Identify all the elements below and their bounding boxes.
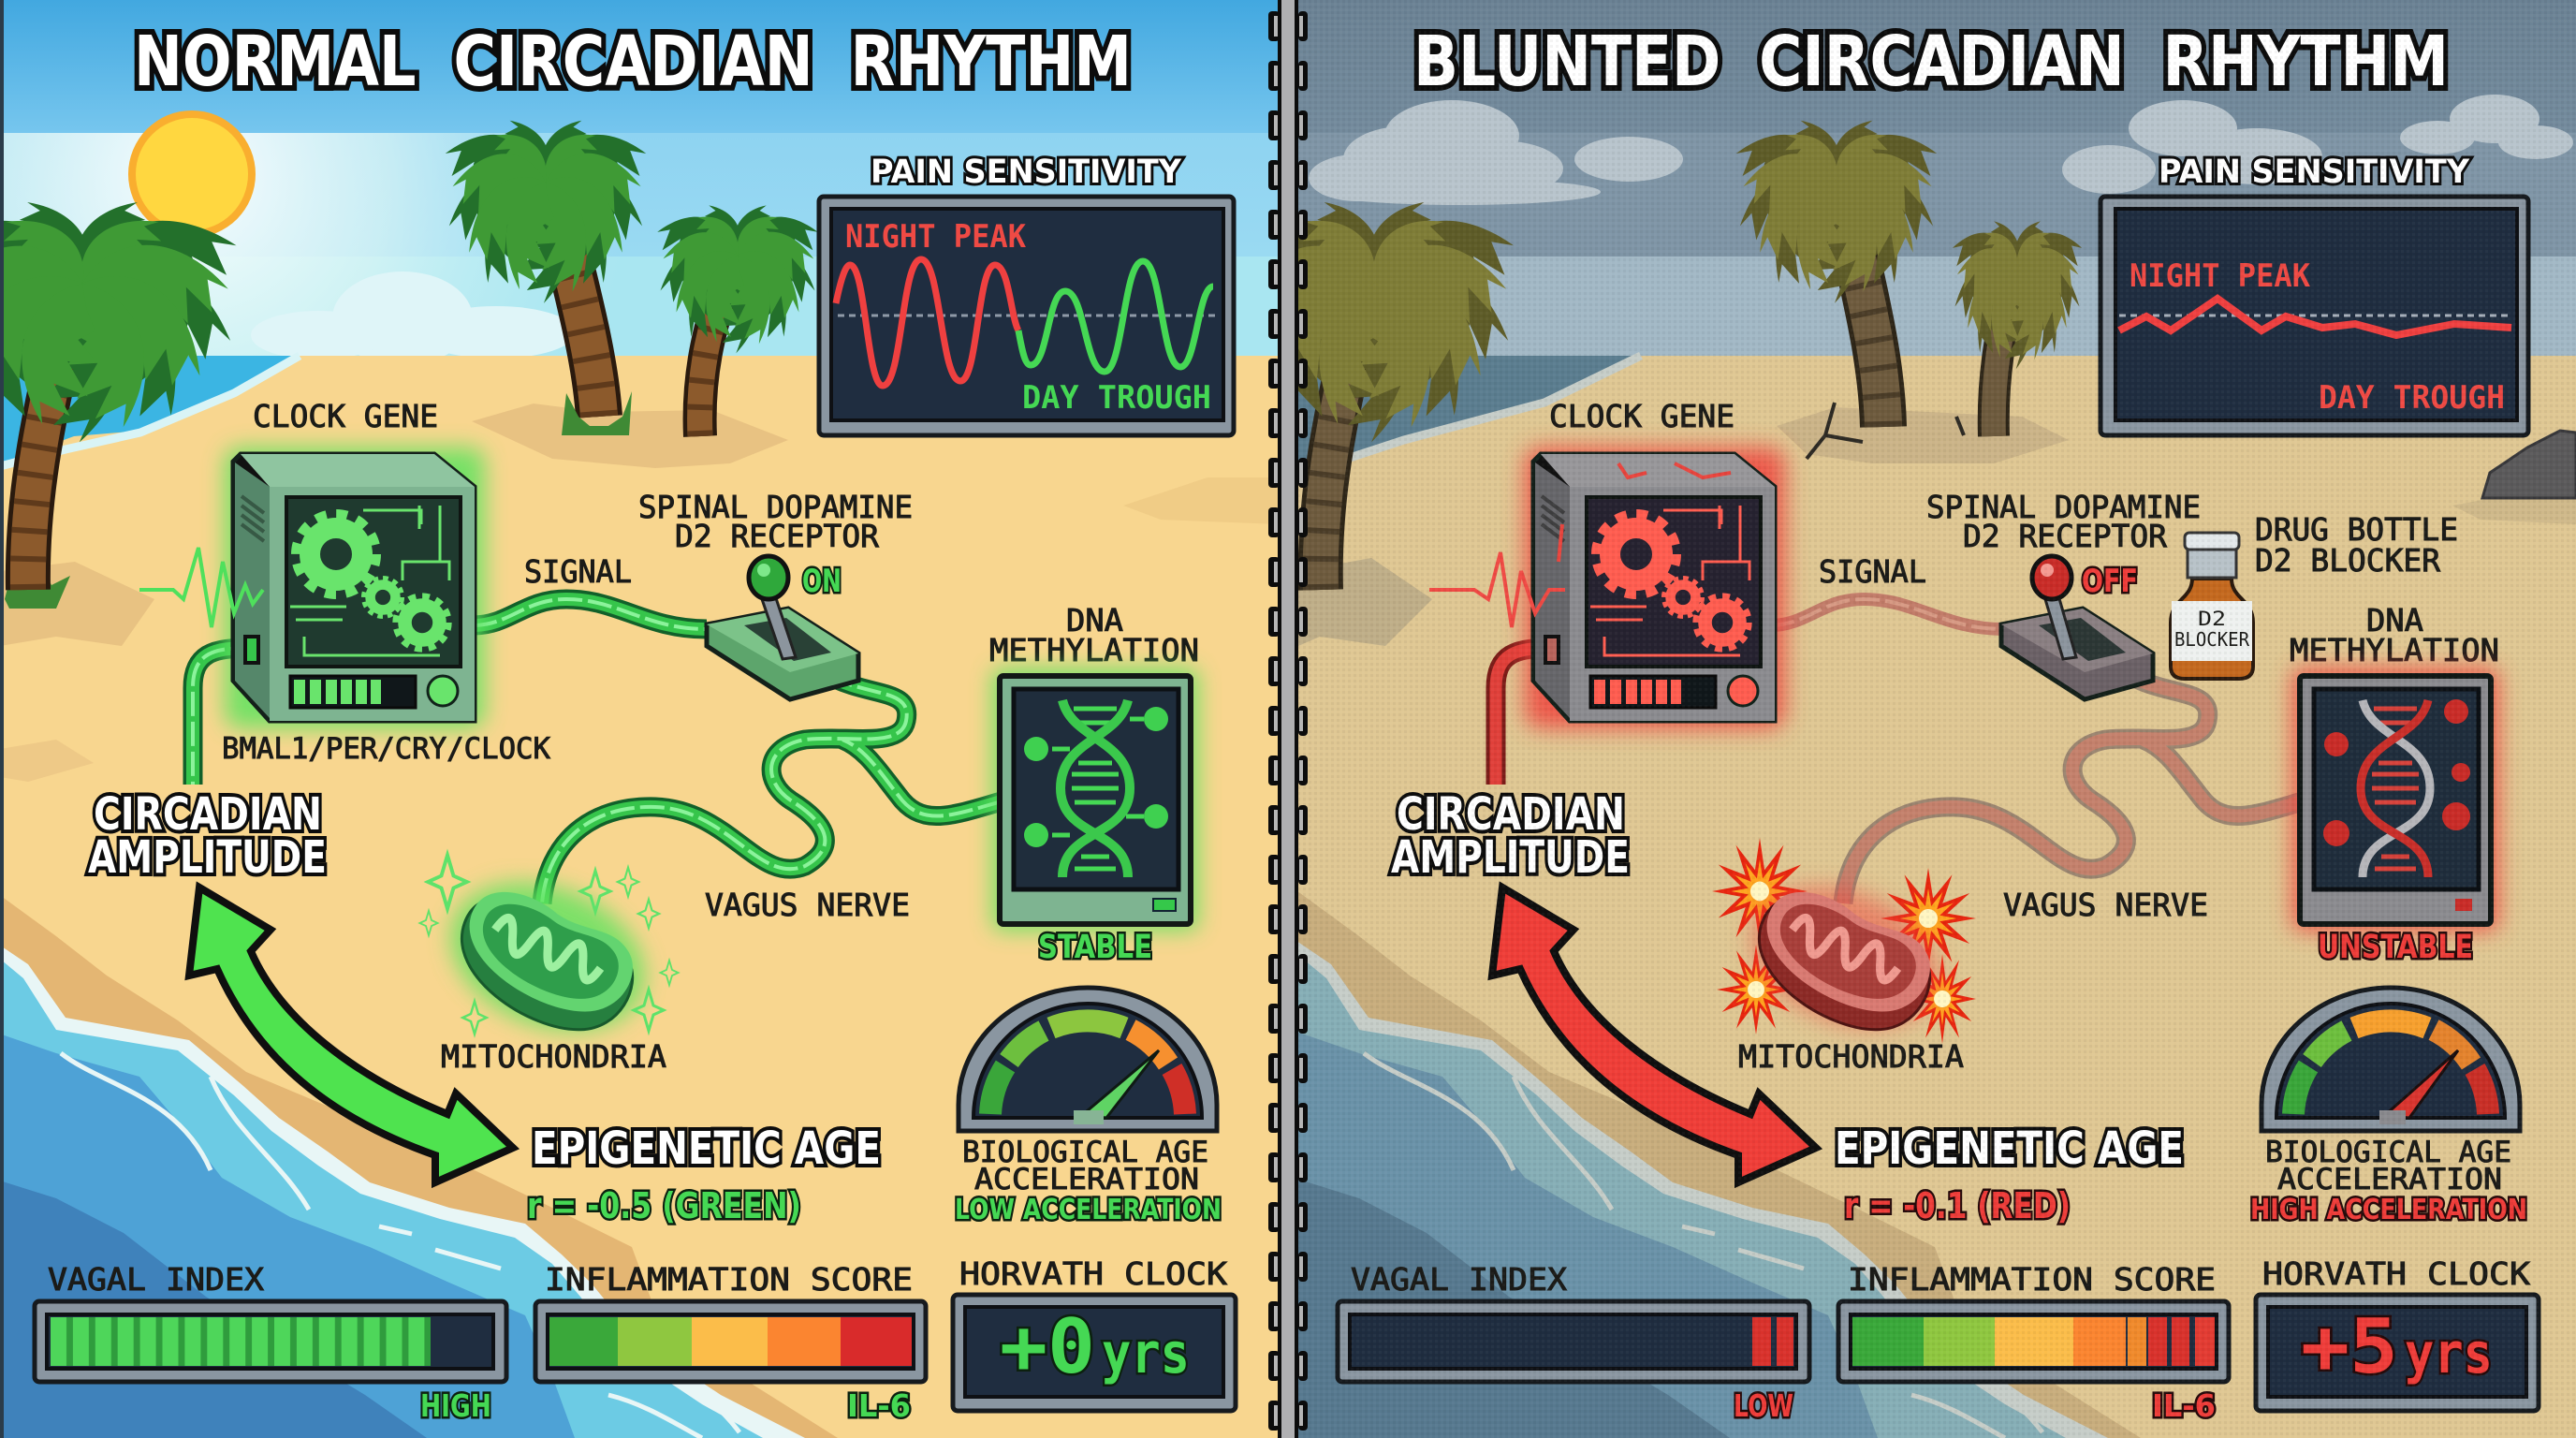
faded vagus nerve cable: [1843, 676, 2303, 903]
biological age gauge: [959, 988, 1217, 1131]
circadian amplitude label: CIRCADIAN: [1397, 788, 1625, 841]
pain sensitivity heading: PAIN SENSITIVITY: [871, 154, 1182, 191]
background: sunny sky and beach: [0, 0, 1279, 1438]
inflammation score bar: [535, 1301, 926, 1382]
double arrow: amplitude to epigenetic age: [1492, 888, 1816, 1182]
icon: palm tree small: [651, 195, 825, 436]
circadian amplitude label: [1391, 788, 1630, 884]
inflammation score label: INFLAMMATION SCORE: [1848, 1261, 2216, 1298]
circadian amplitude label: AMPLITUDE: [1391, 831, 1630, 884]
horvath clock display: +0: [1000, 1303, 1095, 1390]
dna methylation label: DNA: [2366, 602, 2423, 638]
dna panel damaged: [2292, 668, 2498, 931]
icon: palm tree centre: [437, 108, 654, 435]
icon: sparkles: [419, 855, 679, 1034]
drug bottle label: DRUG BOTTLE: [2255, 511, 2458, 548]
d2 switch off: [2001, 556, 2153, 699]
drug bottle: BLOCKER: [2174, 628, 2250, 651]
gauge label: BIOLOGICAL AGE: [2265, 1136, 2511, 1169]
icon: explosions: [1712, 838, 1976, 1044]
clock gene label: CLOCK GENE: [253, 398, 438, 434]
failing signal cable: [1770, 599, 2004, 629]
dna methylation label line two: METHYLATION: [989, 632, 1199, 668]
clock gene machine damaged: [1525, 448, 1785, 728]
pain sensitivity chart: NIGHT PEAK: [2130, 257, 2310, 295]
drug bottle label: D2 BLOCKER: [2255, 542, 2440, 579]
vagal index label: VAGAL INDEX: [1351, 1261, 1567, 1298]
dna methylation label: DNA: [1066, 602, 1123, 638]
vagus nerve cable: [542, 676, 1002, 903]
clock gene machine: [225, 448, 485, 728]
icon: ground cracks: [1807, 403, 1964, 459]
horvath clock display: yrs: [2405, 1321, 2493, 1387]
biological age gauge: [2261, 988, 2520, 1131]
icon: rock: [2482, 431, 2576, 498]
off status: OFF: [2082, 563, 2138, 600]
mitochondria label: MITOCHONDRIA: [1738, 1038, 1964, 1075]
low acceleration status: LOW ACCELERATION: [955, 1194, 1222, 1226]
failing output cable: [1486, 638, 1531, 785]
pain sensitivity chart: DAY TROUGH: [2319, 379, 2505, 417]
circadian output cable: [193, 648, 255, 785]
icon: palm tree left: [0, 184, 249, 609]
dna panel: [992, 668, 1198, 931]
stable status: STABLE: [1038, 929, 1152, 966]
drug bottle label: [2256, 517, 2456, 572]
epigenetic age label: EPIGENETIC AGE: [532, 1123, 881, 1175]
mitochondria label: MITOCHONDRIA: [441, 1038, 666, 1075]
vagal index bar: [1338, 1301, 1809, 1382]
drug bottle: [2171, 533, 2253, 679]
horvath clock label: HORVATH CLOCK: [2262, 1255, 2530, 1292]
il-6 label: IL-6: [2152, 1387, 2216, 1424]
circadian amplitude label: AMPLITUDE: [88, 831, 327, 884]
epigenetic age label: EPIGENETIC AGE: [1835, 1123, 2184, 1175]
vagus nerve label: VAGUS NERVE: [2003, 887, 2208, 923]
circadian amplitude label: [88, 788, 327, 884]
title: NORMAL CIRCADIAN RHYTHM: [134, 22, 1132, 102]
d2 receptor label: SPINAL DOPAMINE: [638, 489, 913, 525]
double arrow: amplitude to epigenetic age: [189, 888, 513, 1182]
gauge label: ACCELERATION: [2277, 1163, 2502, 1196]
inflammation score bar: [1838, 1301, 2229, 1382]
signal label: SIGNAL: [1819, 553, 1926, 590]
unstable status: UNSTABLE: [2318, 929, 2473, 966]
signal cable: [473, 599, 707, 629]
mitochondria: [428, 855, 667, 1059]
d2 receptor label: SPINAL DOPAMINE: [1926, 489, 2201, 525]
icon: wilted palm left: [1298, 202, 1514, 591]
circadian amplitude label: CIRCADIAN: [94, 788, 322, 841]
icon: pulse wave: [139, 548, 263, 627]
pain sensitivity heading: PAIN SENSITIVITY: [2159, 154, 2470, 191]
pain sensitivity chart: NIGHT PEAK: [845, 218, 1026, 256]
gauge label: [2267, 1140, 2510, 1190]
icon: weak pulse wave: [1429, 552, 1565, 627]
d2 receptor label line two: D2 RECEPTOR: [1963, 518, 2167, 554]
correlation value: r = -0.1 (RED): [1844, 1185, 2071, 1226]
background: overcast sky and beach: [1294, 0, 2576, 1438]
gauge label: [962, 1136, 1208, 1196]
bmal1 label: BMAL1/PER/CRY/CLOCK: [222, 732, 550, 766]
vagal index label: VAGAL INDEX: [48, 1261, 264, 1298]
horvath clock display: yrs: [1102, 1321, 1190, 1387]
horvath clock display: +5: [2301, 1303, 2398, 1390]
d2 receptor label line two: D2 RECEPTOR: [675, 518, 879, 554]
gauge label: BIOLOGICAL AGE: [962, 1136, 1208, 1169]
horvath clock display: [2256, 1295, 2539, 1411]
explosion sparks on mitochondria: [1748, 882, 1951, 1007]
pain sensitivity chart: [819, 197, 1234, 435]
gauge label: ACCELERATION: [974, 1163, 1199, 1196]
il-6 label: IL-6: [847, 1387, 911, 1424]
panel: normal circadian rhythm: [0, 0, 1279, 1438]
pain sensitivity chart: DAY TROUGH: [1022, 379, 1211, 417]
vagal index bar: [35, 1301, 506, 1382]
pain sensitivity chart: [2100, 197, 2528, 435]
low label: LOW: [1734, 1387, 1793, 1424]
signal label: SIGNAL: [524, 553, 632, 590]
horvath clock label: HORVATH CLOCK: [959, 1255, 1227, 1292]
d2 switch on: [707, 556, 858, 699]
inflammation score label: INFLAMMATION SCORE: [545, 1261, 913, 1298]
correlation value: r = -0.5 (GREEN): [527, 1185, 801, 1226]
panel: blunted circadian rhythm: [1223, 0, 2576, 1438]
icon: wilted palm small: [1953, 221, 2082, 436]
high label: HIGH: [420, 1387, 491, 1424]
icon: sun: [128, 110, 256, 238]
dna methylation label line two: METHYLATION: [2290, 632, 2499, 668]
high acceleration status: HIGH ACCELERATION: [2250, 1194, 2527, 1226]
clock gene label: CLOCK GENE: [1549, 398, 1734, 434]
icon: wilted palm centre: [1735, 120, 1938, 428]
damaged mitochondria: [1740, 874, 1949, 1039]
on status: ON: [802, 563, 842, 600]
vagus nerve label: VAGUS NERVE: [705, 887, 910, 923]
divider: spiral binding: [0, 0, 1320, 1438]
horvath clock display: [953, 1295, 1236, 1411]
drug bottle: D2: [2198, 608, 2226, 630]
